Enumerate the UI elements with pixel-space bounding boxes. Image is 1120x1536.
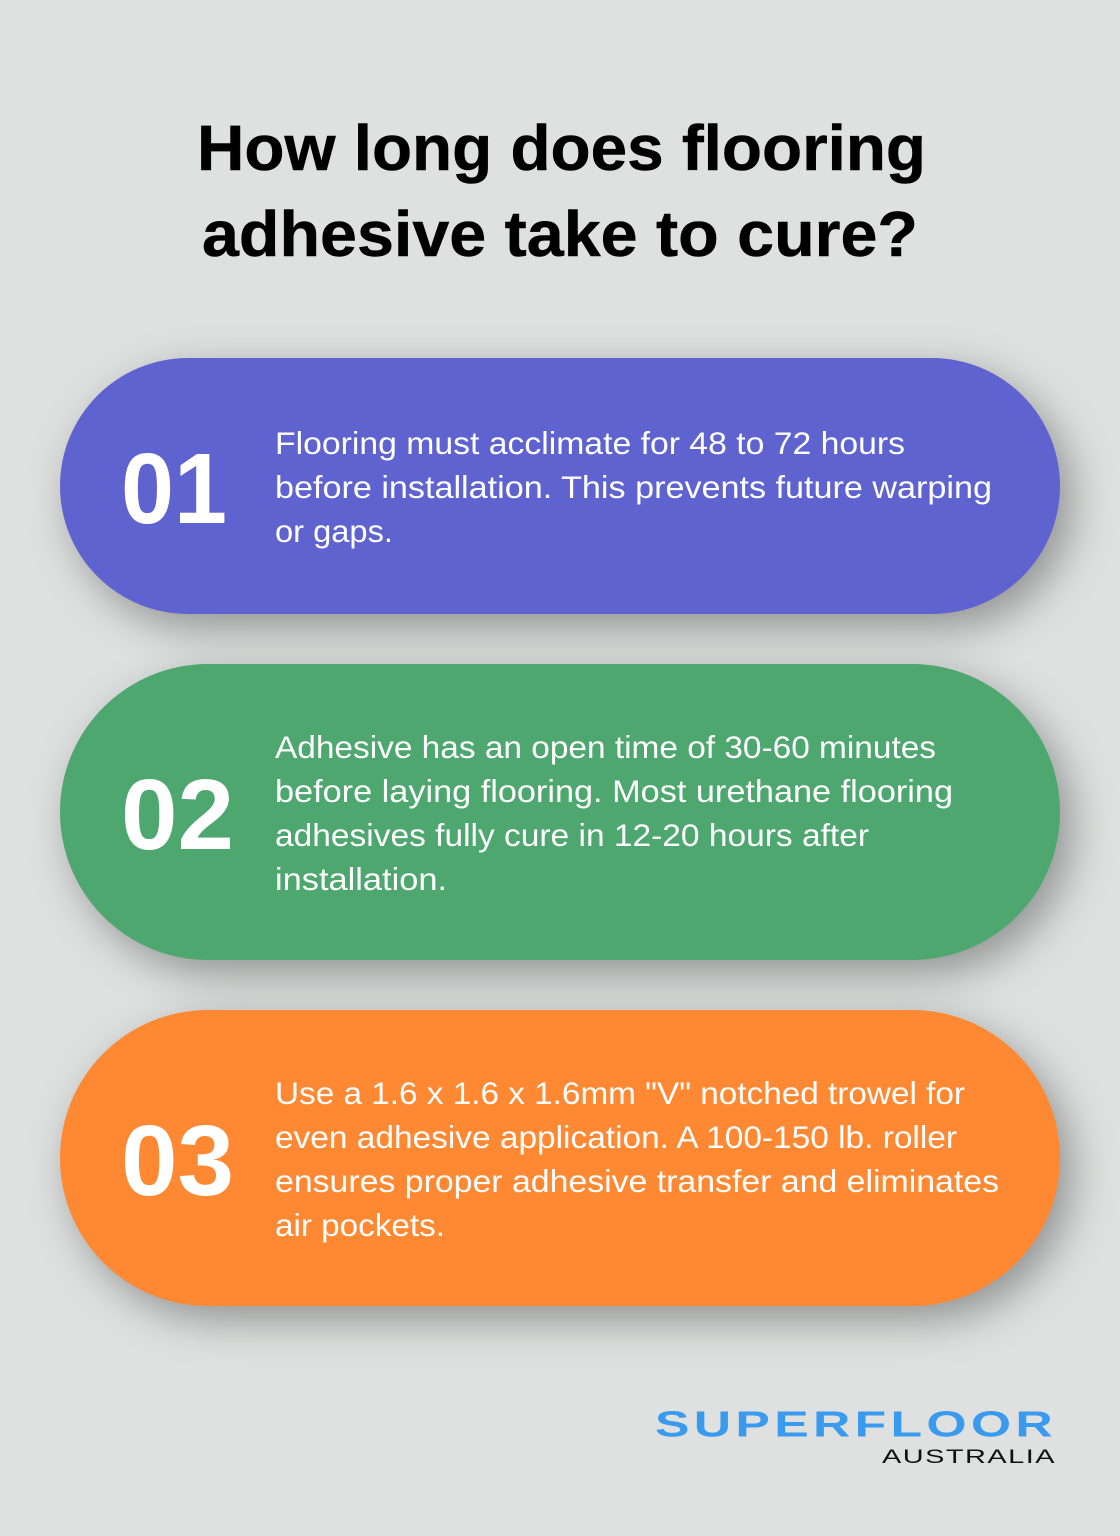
logo bbox=[655, 1404, 1057, 1468]
step 1 number: 01 bbox=[121, 433, 227, 545]
step 3 text bbox=[275, 1075, 999, 1243]
title: adhesive take to cure? bbox=[202, 198, 918, 270]
step 1 content bbox=[121, 425, 992, 549]
step 3 text: Use a 1.6 x 1.6 x 1.6mm "V" notched trowel for bbox=[275, 1075, 965, 1111]
step 1 text: Flooring must acclimate for 48 to 72 hours bbox=[275, 425, 905, 461]
step 2 text: Adhesive has an open time of 30-60 minutes bbox=[275, 729, 936, 765]
logo: AUSTRALIA bbox=[882, 1446, 1056, 1468]
step 2 text bbox=[275, 729, 953, 897]
step 1 text bbox=[275, 425, 992, 549]
panel: step 2 background bbox=[60, 664, 1060, 960]
panel: step 1 background bbox=[60, 358, 1060, 614]
step 1 text: or gaps. bbox=[275, 513, 393, 549]
title: How long does flooring bbox=[197, 112, 926, 184]
title bbox=[197, 112, 926, 270]
step 1 text: before installation. This prevents future warping bbox=[275, 469, 992, 505]
step 3 content bbox=[121, 1075, 999, 1243]
step 3 text: even adhesive application. A 100-150 lb. roller bbox=[275, 1119, 957, 1155]
step 2 content bbox=[121, 729, 953, 897]
step 2 text: installation. bbox=[275, 861, 447, 897]
step 3 number: 03 bbox=[121, 1105, 234, 1217]
step 2 number: 02 bbox=[121, 759, 234, 871]
step 3 text: air pockets. bbox=[275, 1207, 445, 1243]
step 3 text: ensures proper adhesive transfer and eliminates bbox=[275, 1163, 999, 1199]
step 2 text: before laying flooring. Most urethane flooring bbox=[275, 773, 953, 809]
panel: step 3 background bbox=[60, 1010, 1060, 1306]
logo: SUPERFLOOR bbox=[655, 1404, 1057, 1444]
step 2 text: adhesives fully cure in 12-20 hours after bbox=[275, 817, 869, 853]
